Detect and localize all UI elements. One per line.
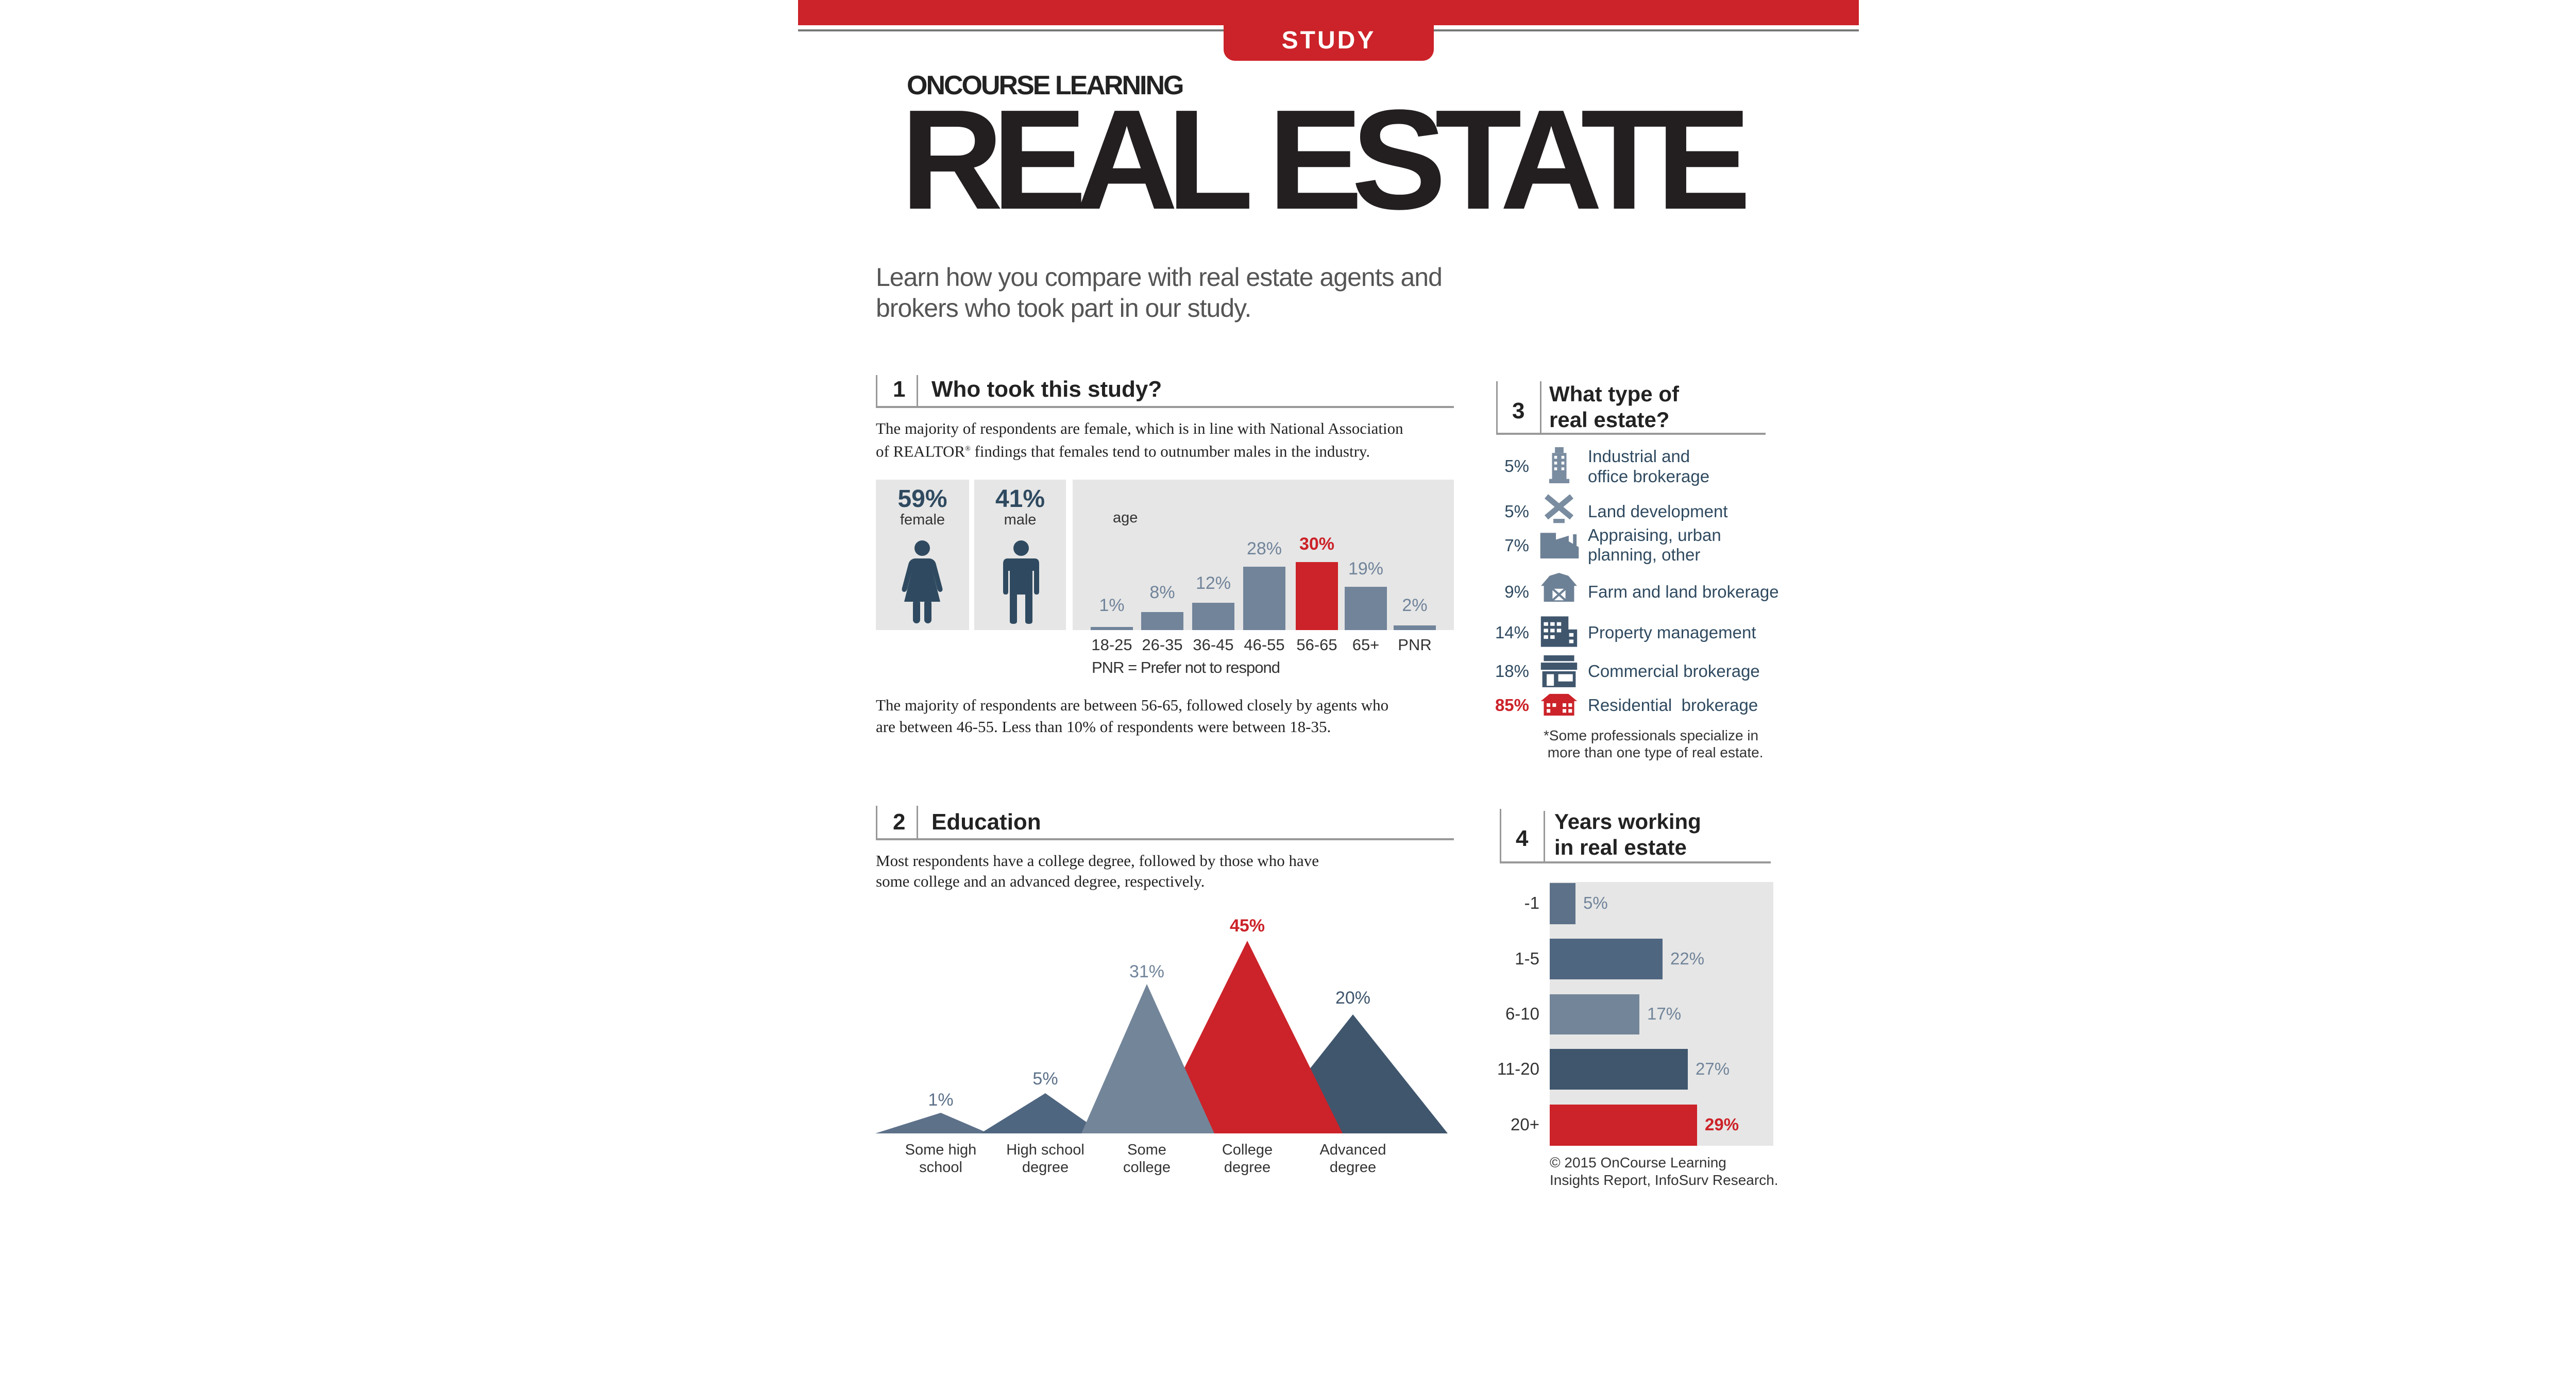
list: real estate types: Residential brokerage: [1588, 696, 1758, 715]
panel: female: [876, 480, 969, 630]
section 1 intro text: [876, 419, 1403, 460]
chart: education triangles: 1%: [928, 1090, 954, 1110]
panel: age chart: age: [1113, 510, 1138, 526]
chart: education triangles: degree: [1022, 1159, 1069, 1176]
panel: male: 41%: [995, 485, 1045, 513]
age axis labels: [1091, 636, 1432, 654]
section 2 text: Most respondents have a college degree, followed by those who have: [876, 852, 1319, 870]
bar chart: age: 19%: [1348, 559, 1383, 579]
intro text: brokers who took part in our study.: [876, 294, 1251, 323]
icon: factory: [1540, 533, 1579, 558]
section 1 header: [876, 375, 1454, 408]
list: real estate types: planning, other: [1588, 545, 1700, 564]
age axis labels: 46-55: [1244, 636, 1285, 654]
source note: [1550, 1155, 1778, 1188]
list: real estate types: 9%: [1504, 582, 1529, 601]
section 3 header: real estate?: [1549, 408, 1669, 432]
footnote: section 3: *Some professionals specialize in: [1544, 727, 1758, 743]
section 1 summary text: The majority of respondents are between 56-65, followed closely by agents who: [876, 696, 1388, 714]
age axis labels: 26-35: [1142, 636, 1183, 654]
list: real estate types: Property management: [1588, 623, 1756, 642]
chart: education triangles: [875, 916, 1448, 1176]
chart: education triangles: Some: [1127, 1142, 1166, 1158]
bar chart: years working: 1-5: [1515, 949, 1539, 968]
section 2 text: [876, 852, 1319, 890]
intro text: [876, 263, 1442, 323]
section 1 summary text: [876, 696, 1388, 736]
section 4 header: in real estate: [1554, 835, 1687, 859]
list: real estate types: 18%: [1495, 661, 1529, 681]
bar chart: years working: 22%: [1670, 949, 1704, 968]
icon: male figure: [1003, 540, 1039, 624]
list: real estate types: 14%: [1495, 623, 1529, 642]
icon: buildings: [1540, 616, 1578, 647]
chart: education triangles: degree: [1330, 1159, 1376, 1176]
list: real estate types: Appraising, urban: [1588, 525, 1721, 545]
chart: education triangles: degree: [1224, 1159, 1270, 1176]
icon: shop: [1540, 655, 1578, 687]
chart: education triangles: 45%: [1230, 916, 1265, 936]
list: real estate types: 85%: [1495, 696, 1529, 715]
PNR note: PNR = Prefer not to respond: [1092, 658, 1280, 676]
bar chart: age: 12%: [1196, 573, 1231, 593]
section 3 header: [1496, 381, 1766, 435]
footnote: section 3: more than one type of real estate.: [1548, 744, 1763, 760]
panel: male: [974, 480, 1066, 630]
brand name: ONCOURSE LEARNING: [907, 71, 1182, 100]
list: real estate types: 5%: [1504, 502, 1529, 521]
icon: female figure: [902, 540, 943, 623]
section 4 header: [1500, 809, 1771, 863]
bar chart: years working: [1497, 882, 1773, 1146]
main title: REAL ESTATE: [901, 80, 1740, 239]
list: real estate types: 7%: [1504, 536, 1529, 555]
bar chart: age: 28%: [1247, 539, 1282, 558]
list: real estate types: [1495, 447, 1779, 716]
study tab: [1224, 21, 1434, 61]
footnote: section 3: [1544, 727, 1763, 760]
chart: education triangles: 5%: [1032, 1069, 1058, 1089]
age axis labels: 65+: [1352, 636, 1379, 654]
chart: education triangles: College: [1222, 1142, 1273, 1158]
chart: education triangles: college: [1123, 1159, 1171, 1176]
source note: Insights Report, InfoSurv Research.: [1550, 1172, 1778, 1188]
bar chart: age: 1%: [1099, 596, 1125, 615]
chart: education triangles: Some high: [905, 1142, 976, 1158]
bar chart: years working: 11-20: [1497, 1059, 1539, 1078]
section 4 header: 4: [1516, 826, 1528, 851]
section 3 header: 3: [1512, 398, 1524, 423]
section 1 intro text: of REALTOR® findings that females tend to outnumber males in the industry.: [876, 442, 1370, 460]
panel: female: female: [900, 512, 945, 528]
chart: education triangles: school: [919, 1159, 962, 1176]
bar chart: age: 30%: [1299, 534, 1334, 554]
top red bar: [798, 0, 1859, 25]
section 3 header: What type of: [1549, 382, 1679, 406]
bar chart: years working: 29%: [1705, 1115, 1739, 1134]
section 1 intro text: The majority of respondents are female, which is in line with National Association: [876, 419, 1403, 437]
bar chart: years working: -1: [1524, 893, 1539, 912]
bar chart: years working: 5%: [1583, 893, 1608, 912]
list: real estate types: Land development: [1588, 502, 1728, 521]
list: real estate types: Farm and land brokerage: [1588, 582, 1779, 601]
age axis labels: PNR: [1398, 636, 1432, 654]
bar chart: age: [1091, 534, 1436, 630]
bar chart: age: 8%: [1149, 583, 1175, 602]
section 2 header: 2: [893, 809, 905, 835]
chart: education triangles: Advanced: [1320, 1142, 1386, 1158]
bar chart: years working: 17%: [1647, 1004, 1681, 1023]
chart: education triangles: 31%: [1129, 962, 1164, 981]
section 1 header: 1: [893, 377, 905, 402]
panel: age chart: [1073, 480, 1454, 630]
age axis labels: 56-65: [1296, 636, 1337, 654]
section 1 header: Who took this study?: [931, 377, 1162, 402]
list: real estate types: Industrial and: [1588, 447, 1690, 466]
bar chart: age: 2%: [1402, 596, 1428, 615]
section 1 summary text: are between 46-55. Less than 10% of respondents were between 18-35.: [876, 718, 1331, 736]
chart: education triangles: High school: [1006, 1142, 1084, 1158]
panel: male: male: [1004, 512, 1036, 528]
age axis labels: 36-45: [1193, 636, 1234, 654]
bar chart: years working: 27%: [1696, 1059, 1730, 1078]
icon: office tower: [1549, 447, 1569, 483]
list: real estate types: office brokerage: [1588, 467, 1709, 486]
list: real estate types: Commercial brokerage: [1588, 661, 1760, 681]
study tab: STUDY: [1282, 27, 1376, 54]
intro text: Learn how you compare with real estate agents and: [876, 263, 1442, 292]
section 2 header: Education: [931, 809, 1041, 835]
section 4 header: Years working: [1554, 809, 1701, 834]
section 2 text: some college and an advanced degree, respectively.: [876, 872, 1205, 890]
panel: female: 59%: [897, 485, 947, 513]
chart: education triangles: 20%: [1335, 988, 1370, 1008]
age axis labels: 18-25: [1091, 636, 1132, 654]
list: real estate types: 5%: [1504, 456, 1529, 476]
icon: barn: [1541, 573, 1577, 602]
icon: house: [1541, 693, 1577, 716]
bar chart: years working: 20+: [1511, 1115, 1539, 1134]
section 2 header: [876, 806, 1454, 840]
source note: © 2015 OnCourse Learning: [1550, 1155, 1726, 1171]
bar chart: years working: 6-10: [1505, 1004, 1539, 1023]
icon: windmill: [1545, 494, 1573, 523]
